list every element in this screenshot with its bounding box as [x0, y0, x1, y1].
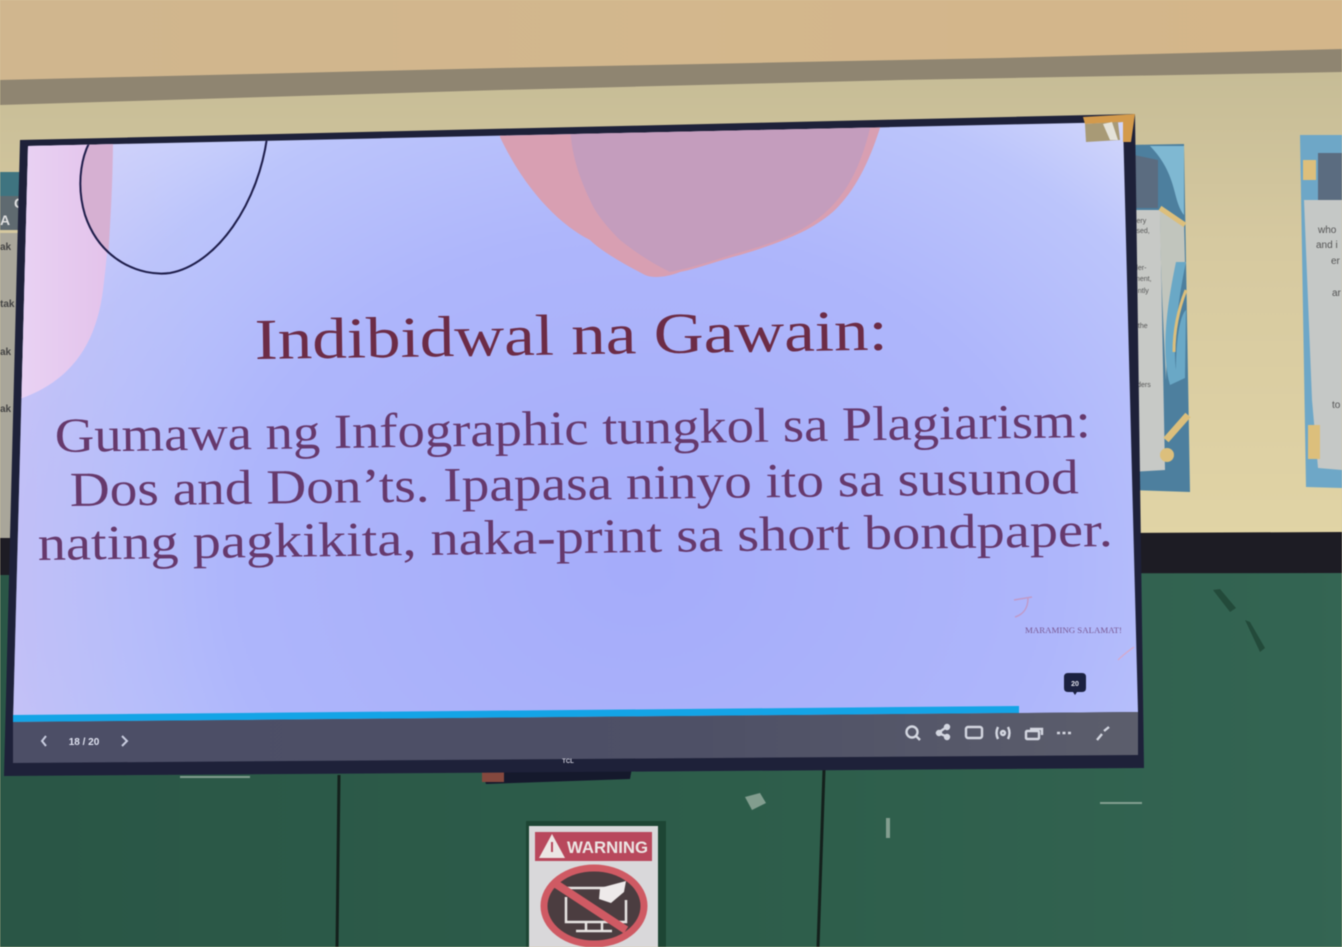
poster: left, behind TV — [0, 172, 24, 538]
poster: far right: and i — [1316, 240, 1338, 251]
TV mount — [482, 768, 632, 784]
outlined circle — [80, 130, 268, 274]
TV brand: TCL — [562, 759, 574, 765]
page badge — [1064, 673, 1086, 695]
poster: far right: ar — [1332, 288, 1342, 299]
thank-you note: MARAMING SALAMAT! — [1025, 626, 1122, 635]
TV screen — [10, 120, 1138, 722]
viewer toolbar — [13, 712, 1138, 763]
warning sign — [526, 821, 666, 947]
instructions text: Dos and Don’ts. Ipapasa ninyo ito sa susunod — [69, 449, 1079, 517]
small squiggle right — [1118, 647, 1134, 660]
small squiggle — [1014, 597, 1032, 617]
pink shape: left — [21, 144, 108, 398]
icon: collapse — [1097, 727, 1109, 740]
pink overlay — [570, 120, 872, 272]
pink shade inside circle — [81, 144, 113, 251]
green wall seams — [337, 770, 824, 947]
poster: left, behind TV: ak — [0, 404, 12, 415]
heading: Indibidwal na Gawain: — [254, 298, 888, 372]
page badge: 20 — [1071, 681, 1079, 688]
TV — [4, 114, 1144, 776]
poster: centre right, behind TV: f the — [1134, 323, 1148, 330]
progress bar — [13, 706, 1019, 722]
next arrow — [122, 736, 127, 746]
poster: centre right, behind TV: ently — [1134, 288, 1149, 295]
TV bezel — [4, 114, 1144, 776]
icon: keyboard — [966, 727, 982, 738]
instructions text: Gumawa ng Infographic tungkol sa Plagiarism: — [54, 393, 1091, 463]
wall scuffs — [180, 776, 1142, 838]
poster: left, behind TV: C — [14, 195, 24, 211]
grey wall band — [0, 49, 1342, 105]
warning sign: WARNING — [567, 838, 648, 857]
poster: left, behind TV: ak — [0, 242, 12, 253]
icon: more — [1057, 732, 1072, 734]
upper wall — [0, 0, 1342, 110]
icon: broadcast — [996, 727, 1010, 739]
poster: centre right, behind TV: very — [1133, 218, 1147, 225]
instructions text: nating pagkikita, naka-print sa short bondpaper. — [37, 502, 1113, 571]
previous arrow — [42, 736, 46, 746]
poster: far right: who — [1317, 225, 1337, 236]
wall marks — [1213, 589, 1265, 652]
icon: window — [1026, 729, 1042, 739]
poster: far right: to — [1332, 400, 1341, 411]
icon: zoom — [906, 726, 920, 740]
instructions text — [37, 393, 1113, 571]
poster: centre right, behind TV: ment, — [1134, 276, 1152, 283]
cream wall — [0, 68, 1342, 560]
poster: centre right, behind TV — [1125, 144, 1190, 492]
pink shape: top centre — [497, 120, 884, 277]
poster: far right: er — [1331, 256, 1341, 267]
page counter: 18 / 20 — [69, 737, 100, 748]
black wall band — [0, 532, 1342, 575]
toolbar icons — [906, 725, 1109, 740]
poster: left, behind TV: A — [0, 212, 10, 228]
icon: share — [937, 725, 949, 739]
green lower wall — [0, 572, 1342, 947]
corner sticker — [1083, 114, 1135, 142]
poster: centre right, behind TV: ilders — [1134, 382, 1151, 389]
poster: centre right, behind TV: ssed, — [1133, 228, 1150, 235]
poster: left, behind TV: tak — [0, 299, 15, 310]
poster: far right — [1300, 135, 1342, 488]
poster: centre right, behind TV: der- — [1134, 265, 1147, 272]
poster: left, behind TV: ak — [0, 347, 12, 358]
